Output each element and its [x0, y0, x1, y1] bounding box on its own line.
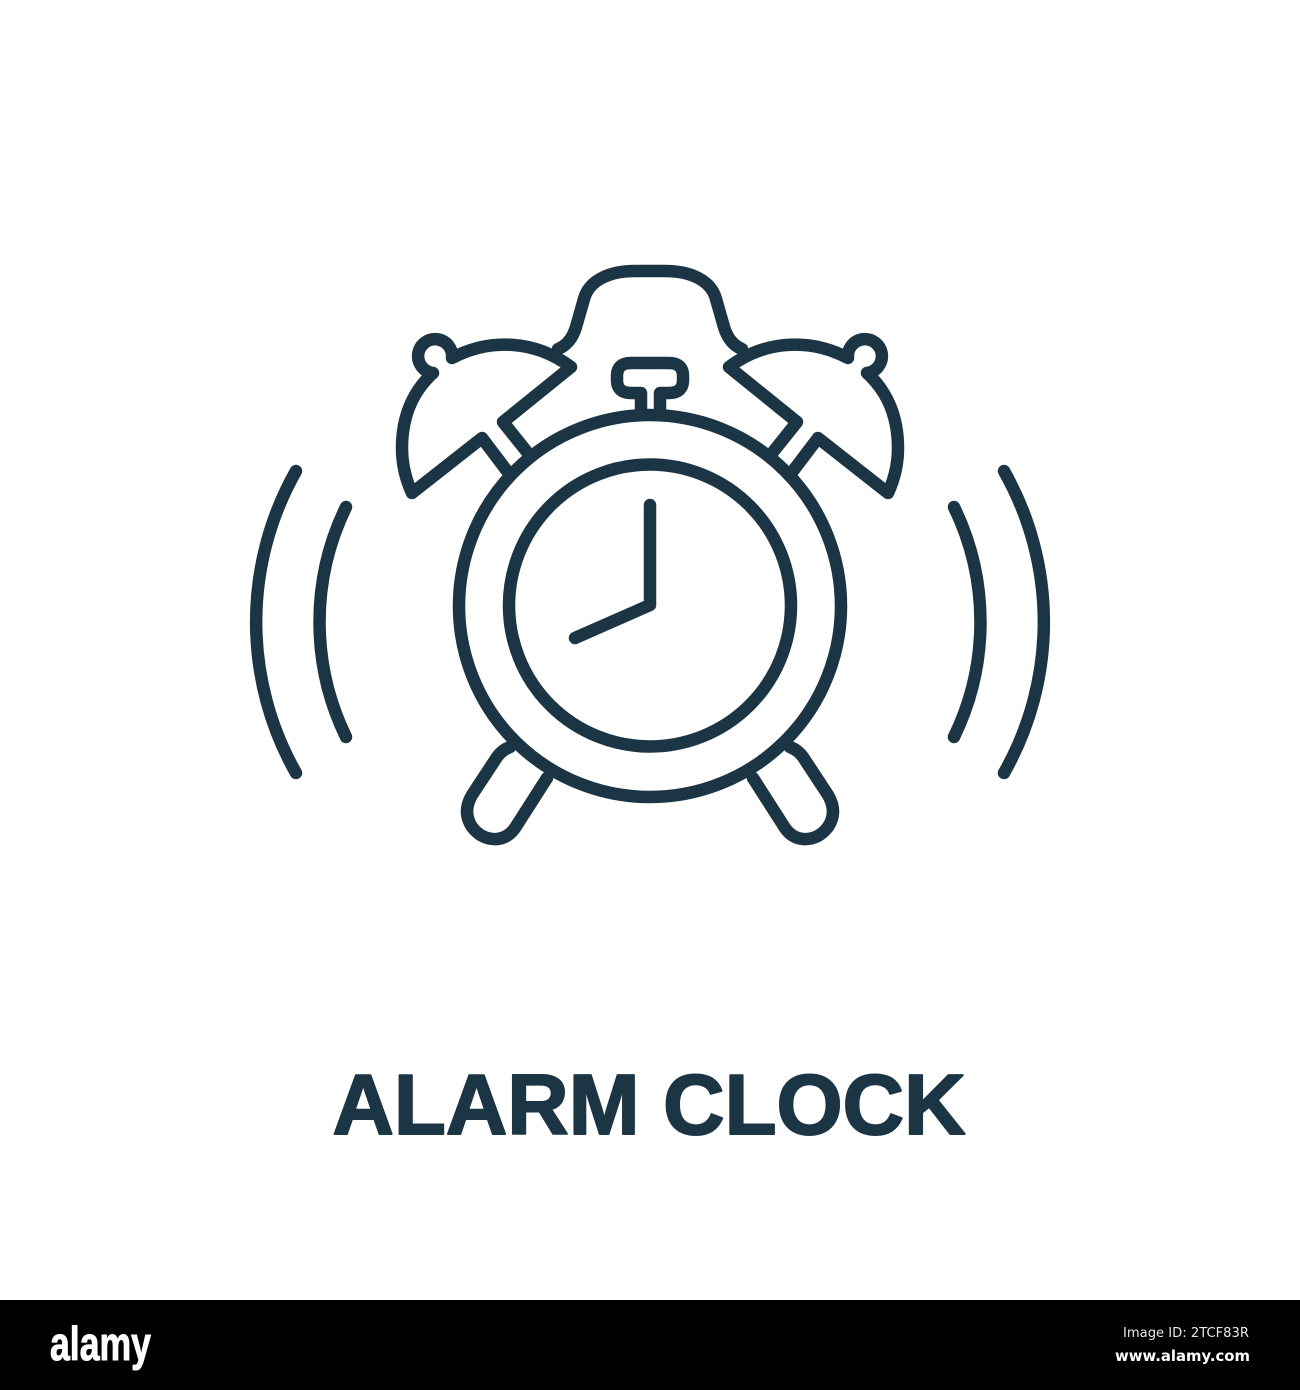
right foot: [753, 747, 833, 839]
top handle: [558, 271, 742, 349]
left bell: [402, 339, 571, 493]
left foot: [467, 747, 547, 839]
winding knob: [617, 363, 683, 414]
title: ALARM CLOCK: [332, 1058, 966, 1153]
footer bar: [0, 1300, 1300, 1390]
clock outer body: [459, 415, 841, 797]
sound waves left: [256, 471, 346, 773]
clock face: [509, 464, 791, 746]
right bell: [729, 339, 898, 493]
footer logo: alamy: [50, 1317, 151, 1370]
website: www.alamy.com: [1115, 1347, 1250, 1365]
clock hands: [575, 505, 650, 638]
image id: Image ID: 2TCF83R: [1123, 1326, 1249, 1341]
sound waves right: [954, 471, 1044, 773]
icon: alarm clock: [256, 271, 1044, 839]
